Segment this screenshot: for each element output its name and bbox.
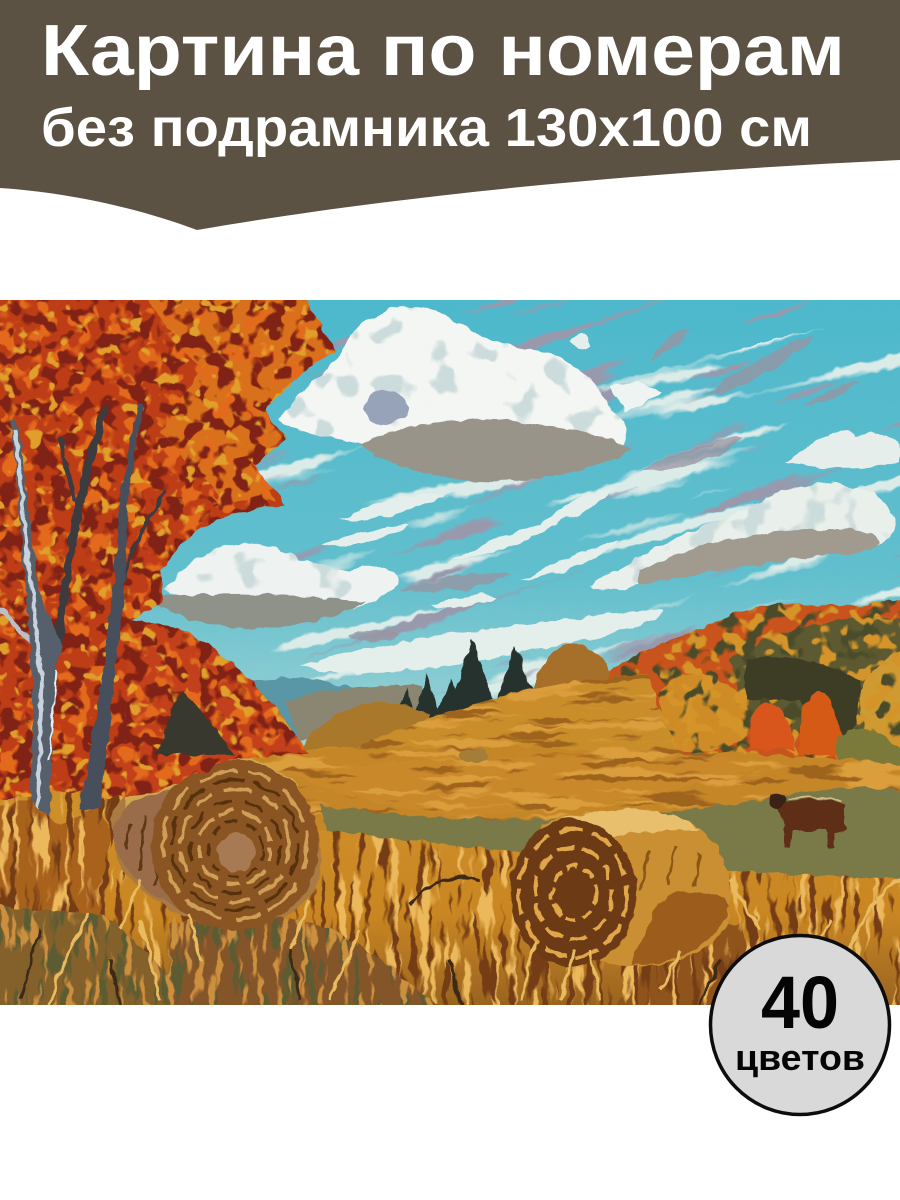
badge number: 40 — [761, 961, 839, 1044]
hay bale left — [110, 755, 322, 930]
tree line right — [600, 600, 900, 775]
badge: 40 colours — [710, 936, 890, 1114]
cow — [769, 793, 845, 848]
small hay bales — [460, 748, 488, 764]
sky — [131, 300, 900, 746]
hills and field — [356, 674, 680, 752]
hay bale right — [510, 810, 730, 967]
sky streaks — [255, 300, 900, 746]
grass blades over bales — [20, 876, 900, 1005]
foreground grass — [0, 790, 900, 1015]
grass over tree base — [0, 800, 110, 915]
header banner — [0, 0, 900, 230]
distant mountains — [253, 676, 423, 740]
badge label: цветов — [735, 1037, 865, 1078]
subtitle: без подрамника 130х100 см — [41, 98, 812, 158]
dark pines center — [400, 638, 534, 718]
clouds — [150, 307, 900, 673]
painting: autumn landscape — [0, 300, 900, 1005]
maple tree and birch trunks — [0, 290, 335, 835]
title: Картина по номерам — [41, 11, 845, 91]
